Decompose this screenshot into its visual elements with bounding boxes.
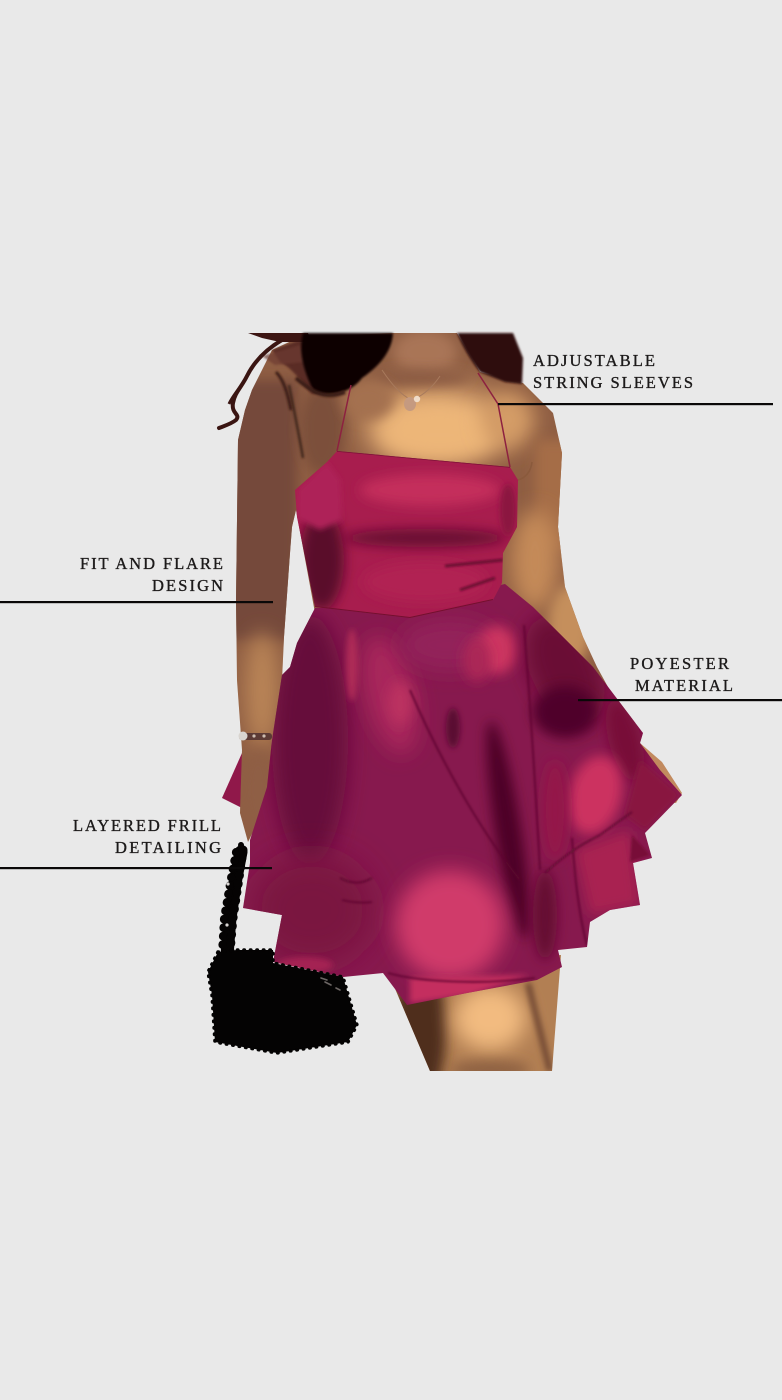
callout: polyester material: POYESTER: [630, 654, 729, 673]
callout: fit and flare design: FIT AND FLARE: [80, 554, 223, 573]
infographic canvas: [0, 331, 782, 1071]
necklace: [382, 370, 440, 411]
upper hip: [406, 624, 476, 666]
armpit crease: [529, 462, 532, 472]
bodice: [295, 451, 518, 618]
skin behind right flounce: [640, 743, 682, 803]
top hair strand: [248, 333, 312, 342]
strand on shoulder: [276, 372, 291, 410]
lower right layers: [533, 870, 557, 960]
bottom highlight: [395, 870, 505, 980]
right highlight: [566, 750, 629, 840]
bag handle: [222, 845, 243, 955]
callout: adjustable string sleeves: [498, 351, 773, 405]
callout: fit and flare design: [0, 554, 273, 603]
callout: adjustable string sleeves: STRING SLEEVES: [533, 373, 693, 392]
crease between arm and chest: [289, 385, 303, 458]
right dark band: [514, 614, 614, 713]
chest glow: [365, 387, 505, 463]
hair: [219, 333, 523, 428]
center dark fold: [446, 708, 460, 748]
handbag: black beaded bag: [208, 845, 357, 1053]
dark hair mass: [301, 333, 393, 394]
legs: [395, 955, 561, 1071]
callout: polyester material: [578, 654, 782, 701]
bracelet: [238, 732, 272, 740]
skirt back layer left: [222, 753, 250, 808]
skin: arms, shoulders and chest: [236, 333, 608, 842]
skirt: [243, 584, 682, 1005]
center-left light panel: [358, 633, 424, 757]
callout: adjustable string sleeves: ADJUSTABLE: [533, 351, 655, 370]
left chest shading: [300, 386, 344, 474]
callout: fit and flare design: DESIGN: [152, 576, 223, 595]
left dark panel: [272, 615, 348, 865]
callout: layered frill detailing: [0, 816, 272, 869]
left arm shading: [225, 380, 297, 640]
hair tint over shoulder: [272, 340, 330, 394]
callout: layered frill detailing: DETAILING: [115, 838, 221, 857]
skirt fold lines: [340, 625, 632, 982]
callout: polyester material: MATERIAL: [635, 676, 733, 695]
neck: [392, 333, 459, 368]
hair on right: [457, 333, 523, 384]
loose wisp: [219, 340, 282, 428]
bag body: [208, 950, 357, 1053]
string straps: [337, 373, 510, 467]
right arm shading: [533, 436, 562, 552]
figure: model in dress: [215, 330, 695, 1105]
callout: layered frill detailing: LAYERED FRILL: [73, 816, 221, 835]
